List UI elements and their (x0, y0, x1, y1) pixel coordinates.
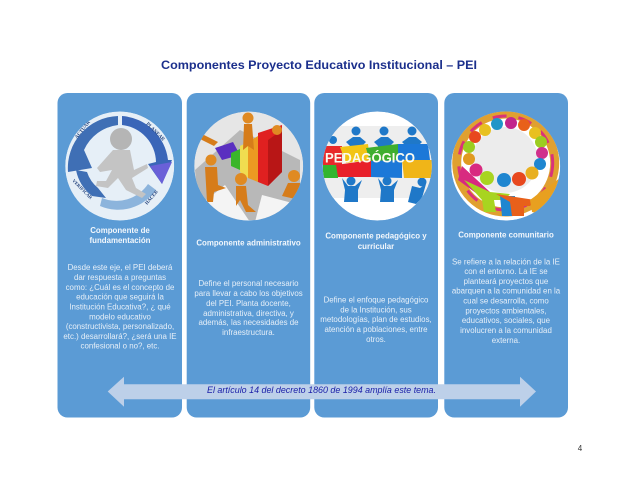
panel: componente de fundamentación (58, 93, 182, 418)
text block: para llevar a cabo los objetivos (194, 289, 303, 298)
icon: puzzle with figures (322, 112, 434, 220)
text block: atención a poblaciones, entre (324, 325, 428, 334)
text block: metodologías, plan de estudios, (320, 315, 432, 324)
heading (325, 232, 427, 251)
icon: PHVA cycle with running figure: HACER (145, 189, 160, 206)
heading: Componente administrativo (196, 238, 301, 248)
text block: Define el enfoque pedagógico (324, 296, 429, 304)
icon: puzzle with figures: PEDAGÓGICO (325, 150, 415, 166)
heading: Componente de (90, 226, 150, 235)
text block: además, las necesidades de (198, 318, 299, 327)
text block: Define el personal necesario (198, 279, 299, 288)
text block: otros. (366, 335, 386, 344)
icon: circle of colourful figures (451, 112, 560, 220)
text block: Desde este eje, el PEI deberá (68, 263, 173, 272)
text block: Se refiere a la relación de la IE (452, 258, 560, 266)
panel: componente comunitario (444, 93, 568, 418)
text block: proyectos ambientales, (465, 306, 547, 316)
text block (320, 296, 432, 344)
text block: con el entorno. La IE se (464, 267, 548, 276)
heading: Componente comunitario (458, 230, 554, 240)
heading (90, 226, 151, 245)
icon: PHVA cycle with running figure (65, 112, 174, 220)
text block: del PEI. Planta docente, (206, 299, 291, 308)
text block: Institución Educativa?, ¿ qué (69, 302, 171, 312)
text block: educación que seguirá la (76, 292, 164, 302)
heading: curricular (358, 242, 394, 251)
text block (452, 258, 561, 345)
heading: Componente pedagógico y (325, 232, 427, 240)
icon: team around bar chart (194, 112, 303, 222)
arrow caption: El artículo 14 del decreto 1860 de 1994 amplía este tema. (207, 385, 436, 395)
text block: como: ¿Cuál es el concepto de (66, 283, 175, 292)
icon: PHVA cycle with running figure: VERIFICAR (71, 178, 94, 201)
panel: componente pedagógico y curricular (314, 93, 438, 418)
text block (63, 263, 177, 350)
text block: de la Institución, sus (340, 306, 412, 314)
text block: abarquen a la comunidad en la (452, 286, 561, 296)
text block: educativos, sociales, que (462, 316, 551, 325)
text block: involucren a la comunidad (460, 326, 552, 335)
text block: externa. (492, 336, 520, 345)
text block: cual se desarrolla, como (463, 296, 549, 306)
title: Componentes Proyecto Educativo Institucional – PEI (161, 58, 477, 72)
page number: 4 (578, 444, 583, 453)
text block: infraestructura. (222, 328, 275, 337)
text block: modelo educativo (89, 312, 152, 322)
text block: confesional o no?, etc. (81, 342, 159, 350)
text block (194, 279, 303, 337)
text block: administrativa, directiva, y (203, 309, 294, 318)
panel: componente administrativo (187, 93, 310, 418)
text block: etc.) desarrollará?, ¿será una IE (63, 332, 177, 341)
icon: PHVA cycle with running figure: ACTUAR (75, 120, 92, 140)
heading: fundamentación (90, 236, 151, 245)
text block: dar respuesta a preguntas (74, 273, 166, 282)
text block: (constructivista, personalizado, (66, 322, 174, 331)
icon: PHVA cycle with running figure: PLANEAR (145, 122, 165, 143)
double-headed arrow (108, 377, 536, 407)
text block: planteará proyectos que (464, 277, 549, 286)
